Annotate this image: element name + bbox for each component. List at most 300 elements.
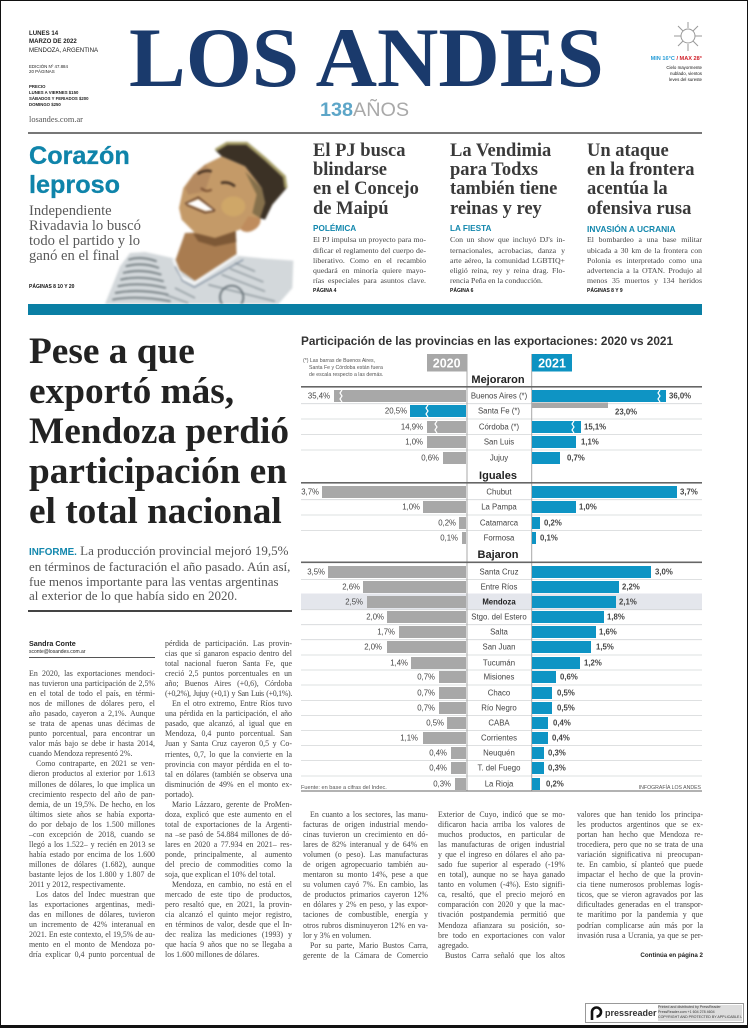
group: Mejoraron: Mejoraron bbox=[471, 374, 525, 386]
summary: El bombardeo a una base militar bbox=[587, 235, 702, 244]
article column 5: variación significativa ni preocupan- bbox=[577, 850, 703, 859]
main headline: Mendoza perdió bbox=[29, 411, 289, 452]
article column 4: agregado. bbox=[438, 941, 469, 950]
group: Bajaron: Bajaron bbox=[478, 549, 519, 561]
headline: para Todxs bbox=[450, 160, 538, 180]
row: La Pampa: La Pampa bbox=[481, 503, 517, 512]
article column 2: mercado de este tipo de productos, bbox=[165, 890, 292, 899]
row: Corrientes: 1,1% bbox=[400, 734, 418, 743]
article column 5: dificultades generadas en el transpor- bbox=[577, 900, 703, 909]
article column 4: bre todo en exportaciones con valor bbox=[438, 931, 565, 940]
row: Misiones bbox=[417, 671, 578, 683]
row: Entre Ríos: 2,6% bbox=[342, 583, 360, 592]
row: Catamarca: 0,2% bbox=[438, 519, 456, 528]
article column 4: Bustos Carra señaló que los altos bbox=[445, 951, 565, 960]
article column 4: Mendoza afianzara su posición, so- bbox=[438, 921, 565, 930]
article column 2: una pérdida en la participación, el año bbox=[165, 709, 292, 718]
article column 1: millones de dólares (1.682), aunque bbox=[29, 860, 155, 869]
row: San Juan bbox=[364, 641, 614, 653]
lead text: ganó en el final bbox=[29, 248, 119, 264]
row: Chaco: 0,5% bbox=[557, 689, 575, 698]
group: Iguales: Iguales bbox=[479, 470, 517, 482]
weather forecast bbox=[651, 56, 702, 82]
row: Entre Ríos: 2,2% bbox=[622, 583, 640, 592]
summary: El PJ impulsa un proyecto para mo- bbox=[313, 235, 426, 244]
smile bbox=[187, 199, 213, 211]
article column 3: de origen agropecuario también au- bbox=[303, 860, 428, 869]
article column 2: disminución de 49% en el monto ex- bbox=[165, 780, 292, 789]
row: Jujuy: 0,6% bbox=[421, 454, 439, 463]
article column 2: que hacía 9 años que no se llegaba a bbox=[165, 940, 292, 949]
article column 4: Exterior de Cuyo, indicó que se mo- bbox=[438, 810, 565, 819]
article column 1: un incremento de 42% interanual en bbox=[29, 920, 155, 929]
summary: quedará en minoría quiere mayo- bbox=[313, 266, 426, 275]
row: Santa Cruz: 3,0% bbox=[655, 568, 673, 577]
row: Entre Ríos: Entre Ríos bbox=[481, 583, 518, 592]
row: La Pampa: 1,0% bbox=[402, 503, 420, 512]
summary: ubicada a 30 km de la frontera con bbox=[587, 246, 702, 255]
row: Misiones: 0,6% bbox=[560, 673, 578, 682]
article column 1: las exportaciones argentinas, medi- bbox=[29, 900, 155, 909]
article column 1: bastante lejos de los 1.800 y 1.807 de bbox=[29, 870, 155, 879]
Mendoza highlight band bbox=[301, 594, 702, 610]
photo: smiling football player bbox=[104, 140, 294, 304]
row: San Juan: 1,5% bbox=[596, 643, 614, 652]
row: Chubut: 3,7% bbox=[301, 488, 319, 497]
row: Jujuy: 0,7% bbox=[567, 454, 585, 463]
article column 1: dieron productos al exterior por 1.613 bbox=[29, 769, 155, 778]
eyes and nose bbox=[198, 171, 235, 186]
article column 1: mento en el monto de Mendoza po- bbox=[29, 940, 155, 949]
intro paragraph: en términos de facturación el año pasado. Aún así, bbox=[29, 559, 290, 574]
row: CABA: CABA bbox=[488, 719, 510, 728]
article column 3 bbox=[303, 810, 428, 960]
headline: en la frontera bbox=[587, 160, 695, 180]
row: Buenos Aires bbox=[308, 390, 691, 402]
article column 2: provincia con mayor pérdida en el to- bbox=[165, 760, 292, 769]
article column 2: na –se pasó de 54.884 millones de dó- bbox=[165, 830, 292, 839]
article column 3: En cuanto a los sectores, las manu- bbox=[310, 810, 428, 819]
row: Neuquén bbox=[429, 747, 566, 759]
article column 1: 2021. En este contexto, el 19,5% de au- bbox=[29, 930, 155, 939]
row: Catamarca: 0,2% bbox=[544, 519, 562, 528]
article column 2: año; Buenos Aires (+0,6), Córdoba bbox=[165, 679, 292, 688]
row: San Luis: 1,1% bbox=[581, 438, 599, 447]
legal text: Printed and distributed by PressReader bbox=[658, 1005, 721, 1009]
row: Santa Fe: Santa Fe (*) bbox=[478, 407, 520, 416]
masthead title: LOS ANDES bbox=[129, 11, 604, 105]
row: La Pampa: 1,0% bbox=[579, 503, 597, 512]
article column 1: nos de millones de dólares pero, el bbox=[29, 699, 155, 708]
2021 legend bbox=[532, 354, 572, 372]
intro paragraph: fue menos importante para las ventas argentinas bbox=[29, 574, 279, 589]
pressreader badge bbox=[585, 1003, 744, 1023]
intro rule bbox=[28, 610, 292, 612]
source note: Fuente: en base a cifras del Indec. bbox=[301, 785, 387, 791]
row: Río Negro bbox=[417, 702, 575, 714]
kicker: INVASIÓN A UCRANIA bbox=[587, 224, 676, 234]
main headline bbox=[29, 331, 289, 532]
article column 5: te marítimo por la pandemia y que bbox=[577, 910, 703, 919]
summary: ternacionales, acrobacias, danza y bbox=[450, 246, 565, 255]
row: La Rioja bbox=[433, 778, 564, 790]
icon: sun weather bbox=[674, 22, 702, 51]
article column 5: cia tiene numerosos problemas logís- bbox=[577, 880, 703, 889]
row: CABA: 0,4% bbox=[553, 719, 571, 728]
article column 5: trocediera, pero que no se trata de una bbox=[577, 840, 703, 849]
row: Mendoza: Mendoza bbox=[482, 598, 516, 607]
article column 5: te. En cambio, sí planteó que puede bbox=[577, 860, 703, 869]
row: San Luis: San Luis bbox=[484, 438, 514, 447]
headline: reinas y rey bbox=[450, 199, 542, 219]
main headline: Pese a que bbox=[29, 331, 195, 372]
row: Misiones: Misiones bbox=[484, 673, 514, 682]
row: Salta: 1,7% bbox=[377, 628, 395, 637]
main headline: el total nacional bbox=[29, 491, 282, 532]
headline: de Maipú bbox=[313, 199, 389, 219]
lead heading bbox=[29, 142, 130, 198]
continuation note: Continúa en página 2 bbox=[640, 952, 703, 959]
edition details: LUNES A VIERNES $150 bbox=[29, 90, 78, 95]
edition details: LUNES 14 bbox=[29, 30, 58, 37]
article column 1: Como contraparte, en 2021 se ven- bbox=[36, 759, 155, 768]
row: La Rioja: 0,3% bbox=[433, 780, 451, 789]
row: Neuquén: 0,3% bbox=[548, 749, 566, 758]
summary: rías especiales para asuntos clave. bbox=[313, 276, 426, 285]
row: San Luis: 1,0% bbox=[405, 438, 423, 447]
row: Río Negro: Río Negro bbox=[481, 704, 517, 713]
row: Córdoba: 14,9% bbox=[401, 423, 423, 432]
row: La Rioja: La Rioja bbox=[485, 780, 514, 789]
article column 3: taciones de combustible, energía y bbox=[303, 910, 428, 919]
article column 4: comparación con 2020 y que la mac- bbox=[438, 900, 565, 909]
row: Tucumán: Tucumán bbox=[483, 659, 515, 668]
summary: Con un show que incluyó DJ's in- bbox=[450, 235, 565, 244]
article column 2: Juan y Santa Cruz cayeron 0,5 y Co- bbox=[165, 739, 292, 748]
masthead rule bbox=[28, 132, 702, 134]
article column 2: los 1.600 millones de dólares. bbox=[165, 950, 259, 959]
article column 1: había estado por encima de los 1.600 bbox=[29, 850, 155, 859]
article column 3: de productos primarios cayeron 12% bbox=[303, 890, 428, 899]
article column 1: millones de dólares, lo que implica un bbox=[29, 780, 155, 789]
story: La Vendimia bbox=[450, 141, 565, 294]
row: Entre Ríos bbox=[342, 581, 640, 593]
row: Tucumán: 1,4% bbox=[390, 659, 408, 668]
row: Tucumán: 1,2% bbox=[584, 659, 602, 668]
row: Tierra del Fuego: T. del Fuego bbox=[478, 764, 521, 773]
edition details: SÁBADOS Y FERIADOS $200 bbox=[29, 96, 89, 101]
row: Corrientes: Corrientes bbox=[481, 734, 517, 743]
summary: advertencia a la OTAN. Produjo al bbox=[587, 266, 702, 275]
row: Salta bbox=[377, 626, 617, 638]
2020 legend: 2020 bbox=[433, 356, 461, 370]
headline bbox=[313, 141, 419, 219]
article column 2: pérdida de participación. Las provin- bbox=[165, 639, 292, 648]
headline: La Vendimia bbox=[450, 141, 551, 161]
scale note: Santa Fe y Córdoba están fuera bbox=[309, 365, 383, 371]
neck bbox=[176, 231, 237, 281]
2021 legend: 2021 bbox=[538, 356, 566, 370]
article column 4: y que el ingreso en dólares el año pa- bbox=[438, 850, 565, 859]
row: Chubut: Chubut bbox=[486, 488, 512, 497]
scale note bbox=[303, 358, 383, 378]
lead text: Independiente bbox=[29, 202, 112, 218]
row: Río Negro: 0,7% bbox=[417, 704, 435, 713]
article column 3: volumen (o peso). Las manufacturas bbox=[303, 850, 428, 859]
article column 1: demia, de un 19,5%. De hecho, en los bbox=[29, 800, 155, 809]
headline bbox=[587, 141, 695, 219]
row: Chaco: Chaco bbox=[488, 689, 511, 698]
row: San Luis bbox=[405, 436, 599, 448]
summary: arte aéreo, la comunidad LGBTIQ+ bbox=[450, 256, 565, 265]
article column 1: En 2020, las exportaciones mendoci- bbox=[29, 669, 155, 678]
article column 1: –con excepción de 2018, cuando se bbox=[29, 830, 155, 839]
row: Mendoza: 2,1% bbox=[619, 598, 637, 607]
page reference: PÁGINAS 8 10 Y 20 bbox=[29, 284, 74, 290]
article column 5: invasión rusa a Ucrania, ya que se per- bbox=[577, 931, 703, 940]
blue divider band bbox=[28, 304, 702, 315]
row: Misiones: 0,7% bbox=[417, 673, 435, 682]
article column 4: muchos productos, en particular de bbox=[438, 830, 565, 839]
article column 2: Mendoza, 0,4 punto porcentual. San bbox=[165, 729, 292, 738]
row: La Pampa bbox=[402, 501, 597, 513]
article column 3: otros rubros disminuyeron 12% en va- bbox=[303, 921, 428, 930]
weather forecast: Cielo mayormente bbox=[666, 65, 702, 70]
row: San Juan: 2,0% bbox=[364, 643, 382, 652]
article column 1: últimos siete años se había exporta- bbox=[29, 810, 155, 819]
intro paragraph: INFORME. La producción provincial mejoró 19,5% bbox=[29, 543, 288, 558]
article column 1: llegó a los 1.522– y recién en 2013 se bbox=[29, 840, 155, 849]
headline: El PJ busca bbox=[313, 141, 406, 161]
article column 2: creció 2,5 puntos porcentuales en un bbox=[165, 669, 292, 678]
row: Santa Cruz: Santa Cruz bbox=[479, 568, 519, 577]
byline: Sandra Conte bbox=[29, 639, 76, 648]
row: Jujuy: Jujuy bbox=[490, 454, 508, 463]
summary: eligió reina, rey y reina drag. Flo- bbox=[450, 266, 565, 275]
row: Formosa: 0,1% bbox=[540, 534, 558, 543]
row: Chubut bbox=[301, 486, 698, 498]
edition details: losandes.com.ar bbox=[29, 115, 83, 124]
row: Salta: 1,6% bbox=[599, 628, 617, 637]
lead heading: leproso bbox=[29, 170, 120, 198]
summary: rencia Peña en la conducción. bbox=[450, 276, 543, 285]
article column 1: nas tuvieron una participación de 2,5% bbox=[29, 679, 155, 688]
summary bbox=[313, 235, 426, 294]
weather forecast: MIN 16°C / MAX 28° bbox=[651, 56, 702, 62]
row: Córdoba: Córdoba (*) bbox=[479, 423, 520, 432]
chart title: Participación de las provincias en las exportaciones: 2020 vs 2021 bbox=[301, 335, 674, 348]
summary: PÁGINA 6 bbox=[450, 288, 473, 294]
anniversary tagline: 138AÑOS bbox=[320, 99, 409, 121]
article column 5: portan han hecho que Mendoza re- bbox=[577, 830, 703, 839]
story: El PJ busca bbox=[313, 141, 426, 294]
legal text bbox=[658, 1005, 742, 1021]
article column 5: valores que han tenido los principa- bbox=[577, 810, 703, 819]
row: Neuquén: 0,4% bbox=[429, 749, 447, 758]
bar chart: provincial export share bbox=[301, 335, 702, 792]
article column 4: ca, resaltó, que el precio mejoró en bbox=[438, 890, 565, 899]
article column 4: tivación postpandemia permitió que bbox=[438, 910, 565, 919]
hair bbox=[215, 143, 287, 220]
row: Corrientes: 0,4% bbox=[552, 734, 570, 743]
article column 1: 2011 y 2012, respectivamente. bbox=[29, 880, 125, 889]
row: Tierra del Fuego: 0,4% bbox=[429, 764, 447, 773]
row: Santa Fe: 23,0% bbox=[615, 408, 637, 417]
article column 2: total de exportaciones de la Argenti- bbox=[165, 820, 292, 829]
article column 4 bbox=[438, 810, 565, 960]
ear bbox=[236, 210, 264, 236]
2020 legend bbox=[427, 354, 466, 372]
row: Formosa bbox=[440, 532, 558, 544]
headline: acentúa la bbox=[587, 179, 668, 199]
headline bbox=[450, 141, 557, 219]
row: Buenos Aires: 36,0% bbox=[669, 392, 691, 401]
row: Santa Cruz bbox=[307, 566, 673, 578]
summary: PÁGINA 4 bbox=[313, 288, 336, 294]
weather forecast: nublado, vientos bbox=[670, 71, 702, 76]
row: Corrientes bbox=[400, 732, 570, 744]
article column 2: doza, explicó que este aumento en el bbox=[165, 810, 292, 819]
article column 2: pasado, que alcanzó, al igual que en bbox=[165, 719, 292, 728]
article column 1: das en millones de dólares, tuvieron bbox=[29, 910, 155, 919]
article column 1: punto porcentual, para encontrar un bbox=[29, 729, 155, 738]
row: Formosa: Formosa bbox=[484, 534, 515, 543]
summary: dificar el reglamento del cuerpo de- bbox=[313, 246, 426, 255]
article column 2: pero resaltó que, en 2021, la provin- bbox=[165, 900, 292, 909]
article column 1: do por debajo de los 1.500 millones bbox=[29, 820, 155, 829]
summary: liberativo. Como en el recambio bbox=[313, 256, 426, 265]
article column 4: tanto en volumen (-4%). Esto signifi- bbox=[438, 880, 565, 889]
row: CABA: 0,5% bbox=[426, 719, 444, 728]
row: Tucumán bbox=[390, 657, 602, 669]
article column 3: cinas tuvieron un crecimiento en dó- bbox=[303, 830, 428, 839]
article column 2: cia alcanzó el quinto mejor registro, bbox=[165, 910, 292, 919]
row: Catamarca bbox=[438, 517, 562, 529]
edition details: EDICIÓN Nº 47.884 bbox=[29, 64, 68, 68]
edition details bbox=[29, 30, 98, 124]
article column 3: Por su parte, Mario Bustos Carra, bbox=[310, 941, 428, 950]
row: San Juan: San Juan bbox=[483, 643, 515, 652]
main headline: exportó más, bbox=[29, 371, 234, 412]
article column 3: facturas de origen industrial mendo- bbox=[303, 820, 428, 829]
article column 2: (+0,2%), Jujuy (+0,1) y San Luis (+0,1%). bbox=[165, 689, 292, 698]
article column 3: gerente de la Cámara de Comercio bbox=[303, 951, 428, 960]
icon: pressreader logo bbox=[590, 1006, 602, 1020]
row: Tierra del Fuego: 0,3% bbox=[548, 764, 566, 773]
row: Mendoza: 2,5% bbox=[345, 598, 363, 607]
article column 2: Mendoza, en cambio, no está en el bbox=[172, 880, 292, 889]
row: Córdoba bbox=[401, 421, 606, 433]
row: Santiago del Estero: Stgo. del Estero bbox=[471, 613, 527, 622]
article column 2: en términos de valor, desde que el In- bbox=[165, 920, 292, 929]
row: Catamarca: Catamarca bbox=[480, 519, 519, 528]
article column 1: cuando Mendoza representó 2%. bbox=[29, 749, 132, 758]
lead text: Rivadavia lo buscó bbox=[29, 218, 141, 234]
article column 2: tal en dólares (también se observa una bbox=[165, 770, 292, 779]
article column 3: mentaron su monto 14%, pese a que bbox=[303, 870, 428, 879]
article column 3: lares de 82% interanual y de 64% en bbox=[303, 840, 428, 849]
lead text: todo el partido y lo bbox=[29, 233, 140, 249]
headline: en el Concejo bbox=[313, 179, 419, 199]
weather forecast: leves del sureste bbox=[669, 77, 702, 82]
headline: blindarse bbox=[313, 160, 387, 180]
row: Santa Fe: 20,5% bbox=[385, 407, 407, 416]
article column 5: ticos, que se vieron agravados por las bbox=[577, 890, 703, 899]
article column 1: Los datos del Indec muestran que bbox=[36, 890, 155, 899]
summary: Polonia es interpretado como una bbox=[587, 256, 702, 265]
row: La Rioja: 0,2% bbox=[546, 780, 564, 789]
byline: sconte@losandes.com.ar bbox=[29, 649, 86, 655]
article column 2: soja, que explican el 10% del total. bbox=[165, 870, 275, 879]
article column 5: les productos argentinos que se ex- bbox=[577, 820, 703, 829]
scale note: (*) Las barras de Buenos Aires, bbox=[303, 358, 375, 364]
article column 1: en el total de todo el país, en térmi- bbox=[29, 689, 155, 698]
article column 4: dificaron hacia arriba los valores de bbox=[438, 820, 565, 829]
summary bbox=[450, 235, 565, 294]
row: Santiago del Estero: 1,8% bbox=[607, 613, 625, 622]
main headline: participación en bbox=[29, 451, 287, 492]
row: Chaco: 0,7% bbox=[417, 689, 435, 698]
shirt crest bbox=[220, 286, 243, 309]
article column 2: portado). bbox=[165, 790, 194, 799]
row: Chaco bbox=[417, 687, 575, 699]
article column 3: en dólares y 2% en peso, y las expor- bbox=[303, 900, 428, 909]
row: Río Negro: 0,5% bbox=[557, 704, 575, 713]
article column 5: podrían complicarse aún más por la bbox=[577, 921, 703, 930]
headline: también tiene bbox=[450, 179, 557, 199]
article column 1 bbox=[28, 669, 155, 959]
row: Formosa: 0,1% bbox=[440, 534, 458, 543]
article column 1: dría explicar 0,4 punto porcentual de bbox=[29, 950, 155, 959]
story: Un ataque bbox=[587, 141, 702, 294]
lead heading: Corazón bbox=[29, 142, 130, 170]
row: Jujuy bbox=[421, 452, 585, 464]
intro paragraph: al exterior de lo que había sido en 2020. bbox=[29, 588, 237, 603]
row: Salta: Salta bbox=[490, 628, 509, 637]
intro paragraph bbox=[29, 543, 290, 603]
article column 2: total nacional fueron Santa Fe, que bbox=[165, 659, 292, 668]
lead story: Corazón leproso bbox=[29, 142, 141, 290]
row: Tierra del Fuego bbox=[429, 762, 566, 774]
headline: ofensiva rusa bbox=[587, 199, 691, 219]
row: CABA bbox=[426, 717, 571, 729]
row: Mendoza bbox=[345, 596, 637, 608]
article column 4: las manufacturas de origen industrial bbox=[438, 840, 565, 849]
summary: menos 35 muertos y 134 heridos bbox=[587, 276, 702, 285]
kicker: POLÉMICA bbox=[313, 224, 356, 233]
brand name: pressreader bbox=[605, 1008, 657, 1018]
article column 2: dec realiza las mediciones (1993) y bbox=[165, 930, 292, 939]
row: Neuquén: Neuquén bbox=[483, 749, 515, 758]
edition details: PRECIO bbox=[29, 84, 45, 89]
article column 2 bbox=[165, 639, 292, 959]
row: Santa Fe bbox=[385, 402, 637, 417]
scale note: de escala respecto a las demás. bbox=[309, 372, 383, 378]
article column 1: se trata de apenas unas décimas de bbox=[29, 719, 155, 728]
article column 1: año pasado, cayeron a 2,1%. Aunque bbox=[29, 709, 155, 718]
article column 2: cias que sí ganaron espacio dentro del bbox=[165, 649, 292, 658]
edition details: 20 PÁGINAS bbox=[29, 68, 55, 74]
infographic credit: INFOGRAFÍA LOS ANDES bbox=[639, 784, 702, 791]
row: Santiago del Estero: 2,0% bbox=[366, 613, 384, 622]
article column 4: en total), aunque no se haya ganado bbox=[438, 870, 565, 879]
article column 5: impactar el hecho de que la provin- bbox=[577, 870, 703, 879]
article column 2: ponde, principalmente, al aumento bbox=[165, 850, 292, 859]
article column 3: lor y 3% en volumen. bbox=[303, 931, 371, 940]
edition details: MENDOZA, ARGENTINA bbox=[29, 47, 98, 54]
headline: Un ataque bbox=[587, 141, 669, 161]
row: Chubut: 3,7% bbox=[680, 488, 698, 497]
